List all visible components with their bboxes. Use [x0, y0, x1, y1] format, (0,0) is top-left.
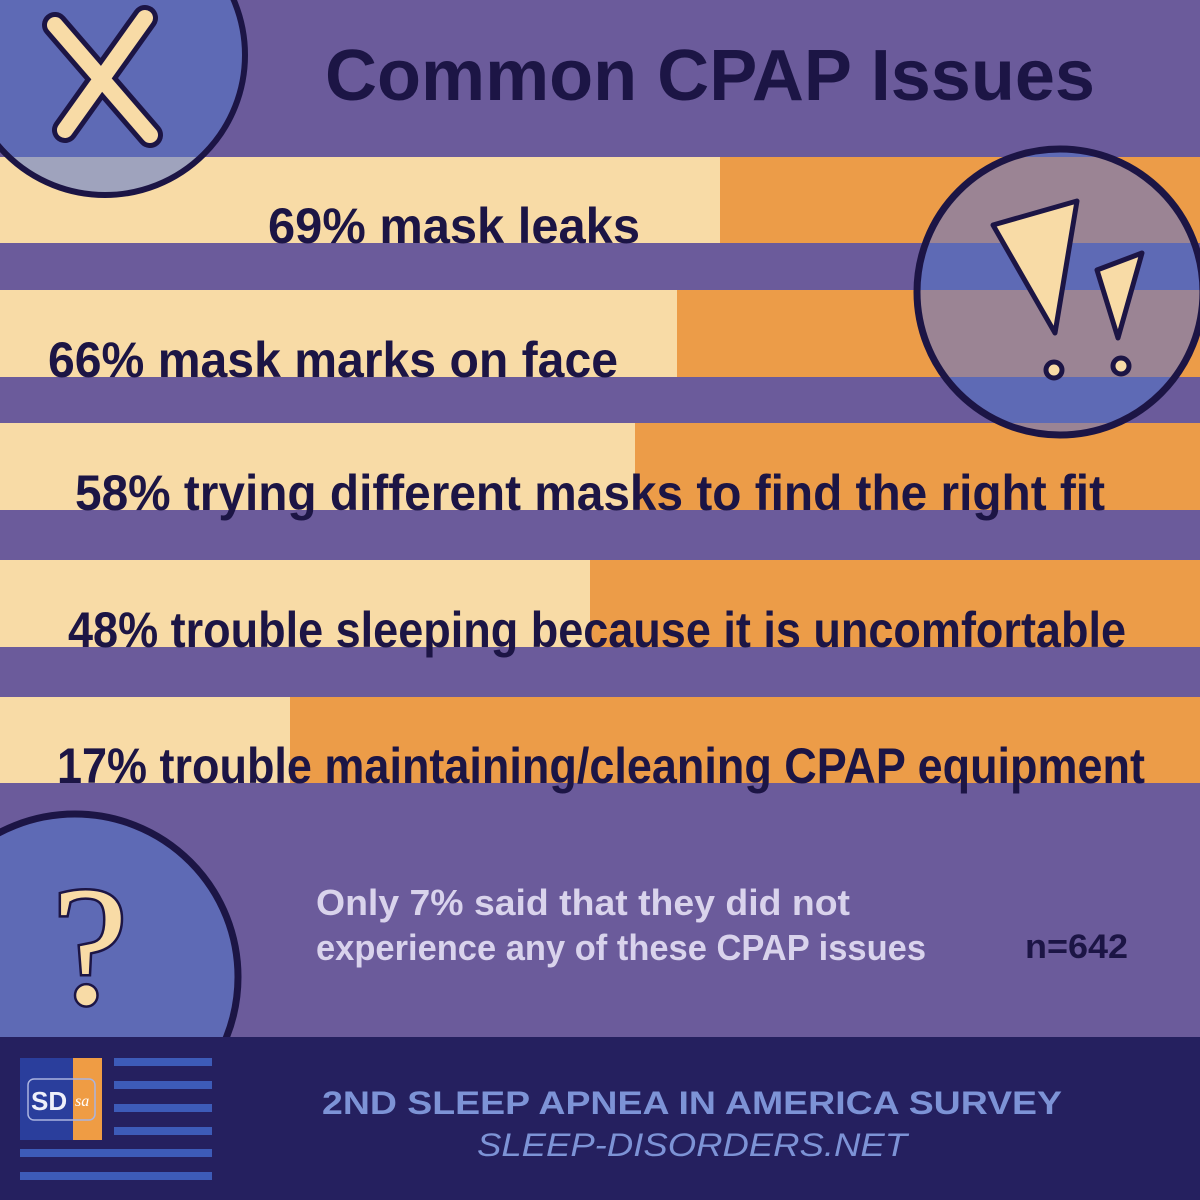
- flag stripes: [20, 1058, 212, 1180]
- icon: question circle: [0, 814, 238, 1140]
- logo: SD: [31, 1086, 67, 1116]
- label: 58% trying different masks: 58% trying different masks to find the right fit: [75, 465, 1105, 521]
- bar: 69%: [0, 157, 1200, 243]
- label: 66% mask marks on face: 66% mask marks on face: [48, 332, 618, 388]
- bar chart: [0, 157, 1200, 783]
- bar: 48%: [0, 560, 1200, 647]
- logo: [20, 1058, 102, 1140]
- sample size: n=642: [1025, 928, 1128, 966]
- footer url: SLEEP-DISORDERS.NET: [477, 1127, 910, 1163]
- icon: question circle: ?: [52, 852, 128, 1040]
- bar: 66%: [0, 290, 1200, 377]
- title: Common CPAP Issues: [325, 36, 1095, 116]
- label: 69% mask leaks: 69% mask leaks: [268, 198, 640, 254]
- note text: [316, 882, 926, 968]
- logo: sa: [75, 1093, 89, 1110]
- note text: experience any of these CPAP issues: [316, 927, 926, 968]
- bar: 58%: [0, 423, 1200, 510]
- note text: Only 7% said that they did not: [316, 882, 850, 923]
- footer: [0, 1037, 1200, 1200]
- icon: exclamation circle: [914, 146, 1200, 438]
- bar: 17%: [0, 697, 1200, 783]
- footer title: 2ND SLEEP APNEA IN AMERICA SURVEY: [322, 1085, 1062, 1121]
- icon: X circle: [0, 0, 248, 198]
